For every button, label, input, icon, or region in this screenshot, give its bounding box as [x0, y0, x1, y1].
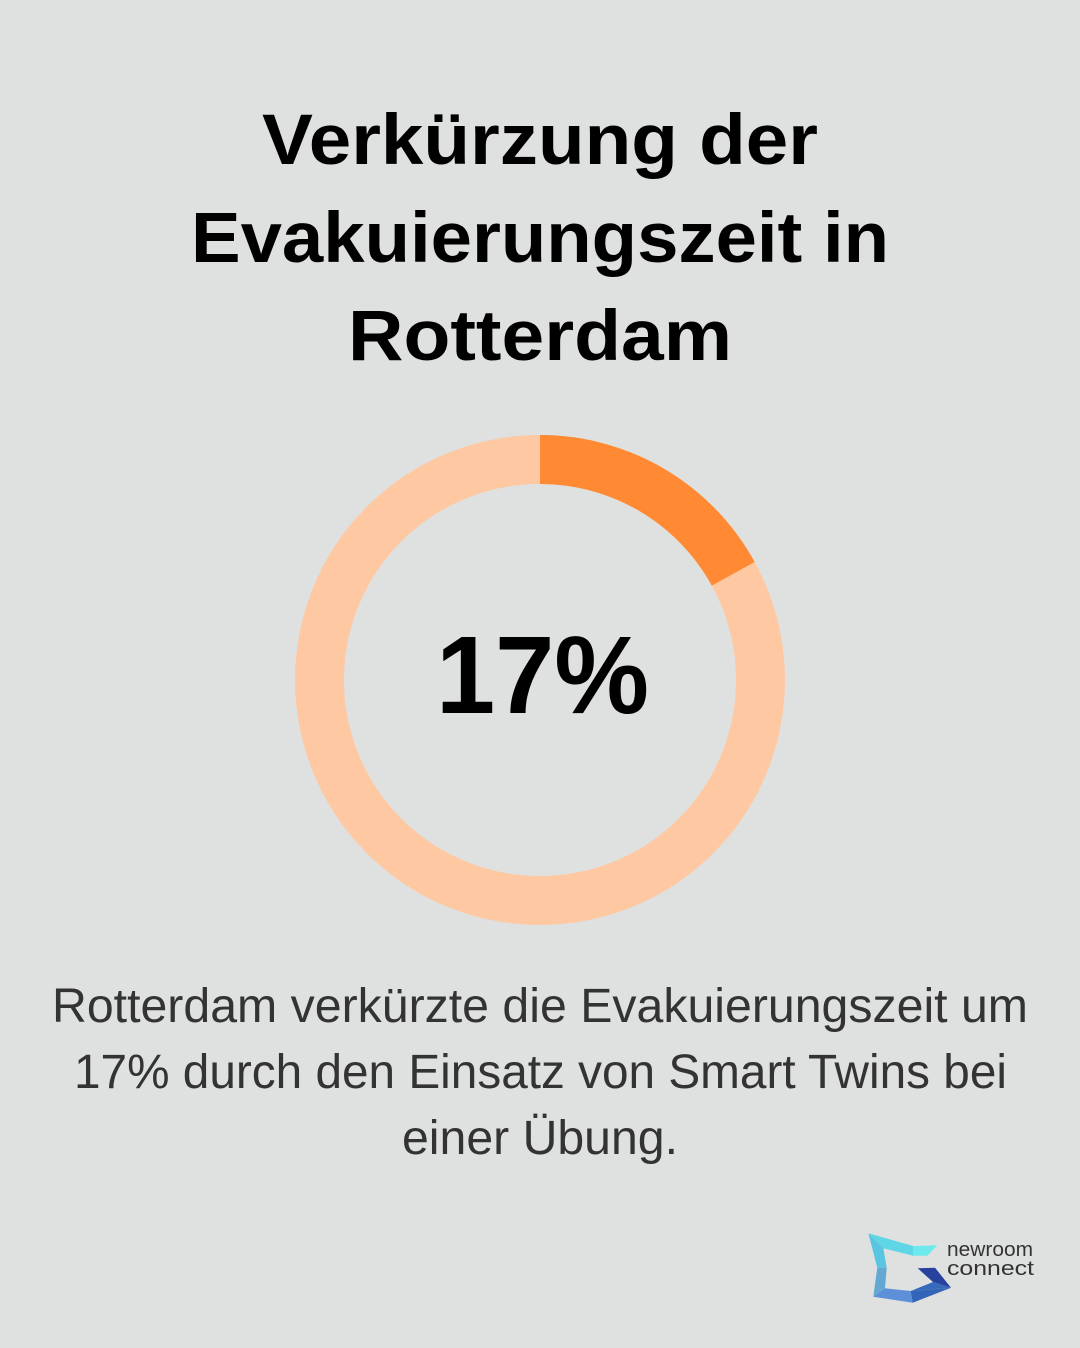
description text: Rotterdam verkürzte die Evakuierungszeit um	[52, 980, 1028, 1033]
center value: 17%	[436, 614, 649, 737]
title: Verkürzung der	[262, 101, 818, 180]
description text: einer Übung.	[402, 1112, 678, 1165]
logo text: newroom	[947, 1238, 1033, 1261]
logo: newroom connect	[868, 1233, 1034, 1303]
description text	[52, 980, 1028, 1165]
title	[191, 101, 889, 376]
title: Rotterdam	[348, 297, 732, 376]
description text: 17% durch den Einsatz von Smart Twins bei	[74, 1046, 1007, 1099]
donut chart: 17%	[320, 435, 760, 900]
title: Evakuierungszeit in	[191, 199, 889, 278]
logo text	[947, 1238, 1034, 1280]
icon: logo mark	[868, 1233, 951, 1303]
logo text: connect	[947, 1257, 1034, 1280]
